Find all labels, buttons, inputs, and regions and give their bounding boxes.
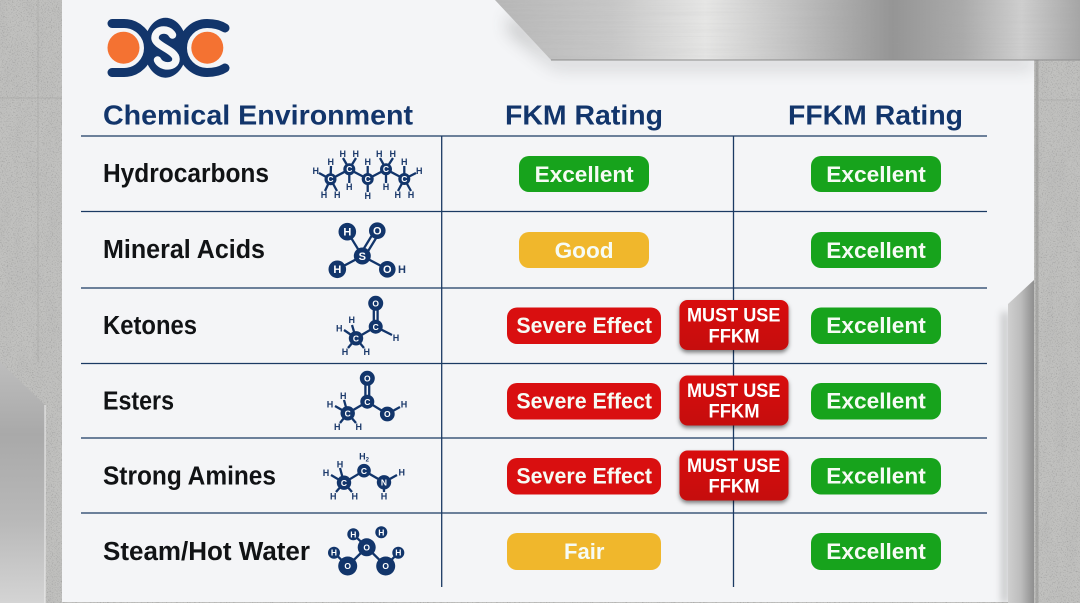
icon: ketone molecule: [336, 296, 399, 357]
icon: amine molecule: N: [381, 478, 387, 488]
icon: sulfuric acid molecule: H: [398, 264, 406, 276]
icon: sulfuric acid molecule: O: [383, 264, 392, 276]
panel: brushed metal right bracket: [1002, 280, 1034, 603]
badge: FFKM Excellent: Excellent: [826, 539, 926, 564]
badge: FKM Excellent: Excellent: [535, 162, 634, 187]
row label: Esters: [103, 388, 174, 416]
callout: MUST USE FFKM: MUST USE: [687, 455, 780, 477]
badge: FKM Severe Effect: Severe Effect: [516, 313, 652, 338]
icon: hydrocarbon molecule: H: [339, 149, 346, 159]
icon: ester molecule: C: [364, 397, 370, 407]
icon: water cluster molecule: O: [363, 542, 370, 552]
row: Strong Amines: [103, 450, 941, 502]
badge: FFKM Excellent: [811, 232, 941, 268]
row label: Strong Amines: [103, 462, 276, 490]
icon: ketone molecule: H: [363, 347, 370, 357]
row label: Steam/Hot Water: [103, 538, 310, 566]
icon: water cluster molecule: [328, 526, 404, 576]
icon: ester molecule: H: [401, 400, 407, 410]
icon: ketone molecule: H: [342, 347, 348, 357]
badge: FFKM Excellent: Excellent: [826, 464, 926, 488]
icon: hydrocarbon molecule: H: [334, 190, 341, 200]
icon: water cluster molecule: H: [331, 548, 337, 558]
icon: hydrocarbon molecule: C: [383, 164, 389, 174]
row: Steam/Hot Water: [103, 526, 941, 576]
callout: MUST USE FFKM: FFKM: [708, 476, 760, 498]
badge: FFKM Excellent: Excellent: [826, 313, 926, 338]
callout: MUST USE FFKM: [680, 450, 788, 500]
icon: sulfuric acid molecule: [328, 222, 406, 278]
icon: ketone molecule: O: [372, 298, 379, 308]
icon: ester molecule: H: [340, 391, 347, 401]
icon: hydrocarbon molecule: H: [408, 190, 414, 200]
icon: hydrocarbon molecule: H: [383, 182, 389, 192]
icon: ketone molecule: C: [353, 334, 359, 344]
badge: FFKM Excellent: [811, 308, 941, 344]
icon: hydrocarbon molecule: H: [376, 149, 383, 159]
callout: MUST USE FFKM: [680, 376, 788, 426]
icon: hydrocarbon molecule: H: [364, 191, 371, 201]
icon: hydrocarbon molecule: H: [394, 190, 401, 200]
icon: hydrocarbon molecule: [312, 149, 423, 201]
icon: sulfuric acid molecule: S: [359, 251, 366, 263]
icon: amine molecule: H: [323, 468, 329, 478]
icon: water cluster molecule: H: [378, 527, 384, 537]
heading: FKM Rating: FKM Rating: [505, 100, 663, 130]
badge: FFKM Excellent: [811, 156, 941, 192]
icon: ester molecule: H: [355, 422, 362, 432]
icon: hydrocarbon molecule: H: [321, 190, 327, 200]
icon: amine molecule: H: [330, 492, 337, 502]
icon: amine molecule: C: [341, 478, 347, 488]
row: Mineral Acids: [103, 222, 941, 278]
icon: ester molecule: O: [384, 409, 391, 419]
callout: MUST USE FFKM: MUST USE: [687, 380, 780, 402]
badge: FFKM Excellent: [811, 533, 941, 570]
icon: ketone molecule: C: [373, 322, 379, 332]
icon: hydrocarbon molecule: C: [401, 174, 407, 184]
icon: amine molecule: H: [359, 452, 366, 462]
panel: brushed metal top bracket: [480, 0, 1080, 66]
icon: hydrocarbon molecule: H: [312, 166, 319, 176]
icon: amine molecule: H: [381, 492, 387, 502]
icon: amine molecule: 2: [366, 458, 370, 464]
badge: FFKM Excellent: [811, 458, 941, 494]
badge: FKM Severe Effect: Severe Effect: [516, 464, 652, 488]
row label: Hydrocarbons: [103, 160, 269, 188]
icon: amine molecule: C: [361, 466, 367, 476]
icon: water cluster molecule: H: [350, 529, 356, 539]
icon: hydrocarbon molecule: H: [346, 182, 353, 192]
badge: FFKM Excellent: Excellent: [826, 238, 926, 263]
icon: ketone molecule: H: [336, 324, 343, 334]
icon: hydrocarbon molecule: H: [389, 149, 396, 159]
row: Esters: [103, 371, 941, 432]
icon: ester molecule: C: [345, 408, 351, 418]
icon: hydrocarbon molecule: C: [327, 174, 334, 184]
badge: FKM Fair: [507, 533, 661, 570]
row label: Ketones: [103, 312, 197, 340]
row label: Mineral Acids: [103, 236, 265, 264]
table grid lines: [81, 136, 987, 587]
icon: hydrocarbon molecule: H: [352, 149, 359, 159]
badge: FKM Severe Effect: [507, 458, 661, 494]
row: Ketones: [103, 296, 941, 357]
icon: ester molecule: O: [364, 374, 371, 384]
badge: FKM Good: [519, 232, 649, 268]
icon: ester molecule: [327, 371, 407, 432]
icon: hydrocarbon molecule: H: [401, 157, 408, 167]
icon: amine molecule: H: [351, 492, 358, 502]
heading: FFKM Rating: FFKM Rating: [788, 100, 963, 130]
icon: hydrocarbon molecule: C: [346, 164, 352, 174]
icon: hydrocarbon molecule: H: [416, 166, 423, 176]
icon: ketone molecule: H: [393, 333, 399, 343]
badge: FKM Severe Effect: Severe Effect: [516, 388, 652, 414]
logo: DSC: [108, 18, 225, 78]
callout: MUST USE FFKM: MUST USE: [687, 305, 780, 327]
row: Hydrocarbons: [103, 149, 941, 201]
icon: hydrocarbon molecule: H: [327, 157, 334, 167]
icon: amine molecule: [323, 452, 405, 502]
panel: brushed metal left bracket: [0, 362, 45, 603]
icon: hydrocarbon molecule: C: [365, 174, 371, 184]
badge: FKM Severe Effect: [507, 308, 661, 344]
icon: sulfuric acid molecule: O: [373, 226, 382, 238]
badge: FFKM Excellent: [811, 383, 941, 420]
callout: MUST USE FFKM: [680, 300, 788, 350]
icon: hydrocarbon molecule: H: [364, 157, 371, 167]
badge: FKM Severe Effect: [507, 383, 661, 420]
icon: water cluster molecule: O: [344, 561, 351, 571]
icon: ester molecule: H: [334, 422, 341, 432]
icon: sulfuric acid molecule: H: [333, 264, 341, 276]
icon: sulfuric acid molecule: H: [343, 226, 351, 238]
heading: Chemical Environment: Chemical Environment: [103, 100, 413, 130]
icon: ester molecule: H: [327, 400, 333, 410]
icon: water cluster molecule: O: [382, 561, 389, 571]
badge: FKM Fair: Fair: [564, 539, 605, 564]
icon: amine molecule: H: [398, 468, 405, 478]
badge: FFKM Excellent: Excellent: [826, 162, 926, 187]
callout: MUST USE FFKM: FFKM: [708, 325, 760, 347]
badge: FKM Excellent: [519, 156, 649, 192]
icon: ketone molecule: H: [348, 315, 355, 325]
badge: FFKM Excellent: Excellent: [826, 388, 926, 414]
badge: FKM Good: Good: [555, 238, 614, 263]
icon: amine molecule: H: [337, 460, 343, 470]
callout: MUST USE FFKM: FFKM: [708, 401, 760, 423]
icon: water cluster molecule: H: [395, 548, 401, 558]
